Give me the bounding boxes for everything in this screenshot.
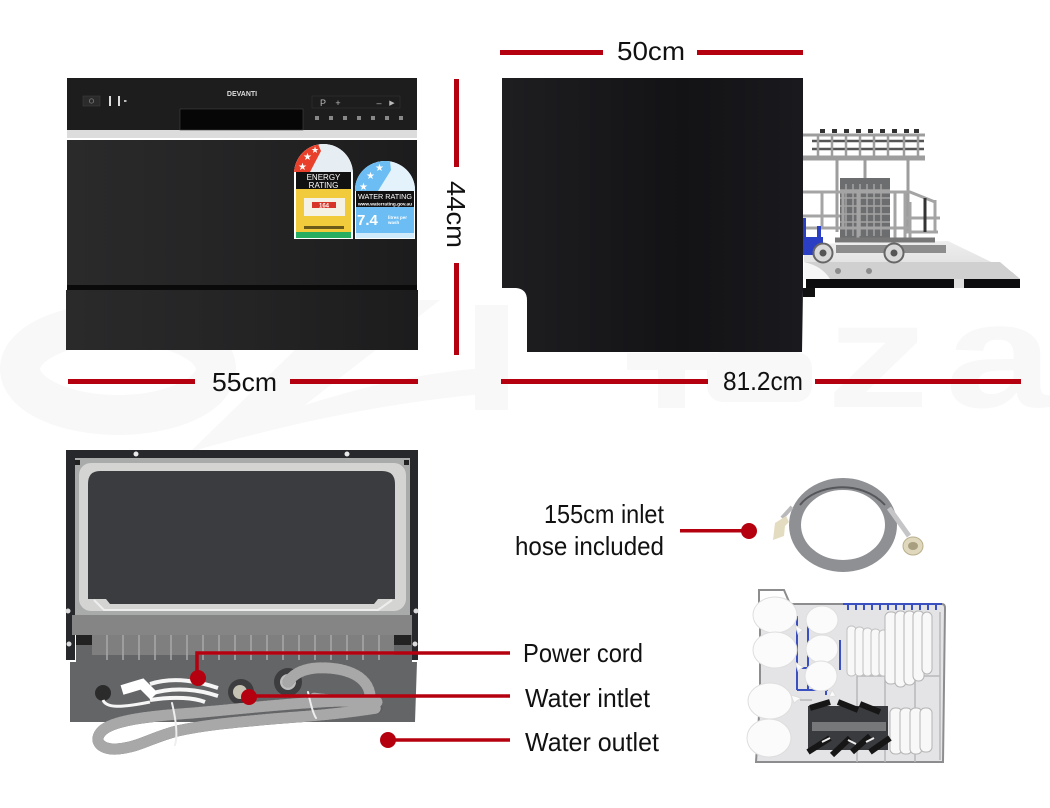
callout: water outlet: [380, 727, 660, 757]
callout: inlet hose: hose included: [515, 531, 664, 561]
rack wires: [800, 612, 940, 762]
blue clips: [803, 218, 823, 255]
callout: water inlet: Water intlet: [525, 683, 651, 713]
silver frame: [75, 458, 410, 616]
lower hose: [98, 692, 377, 749]
silver strip: [67, 130, 417, 138]
grey bar: [72, 615, 412, 635]
dimension: 44cm: 44cm: [441, 181, 471, 248]
water rating label: ★: [375, 163, 384, 174]
power cord: [103, 680, 218, 706]
dishwasher rear view: [66, 450, 418, 749]
control panel: DEVANTI: [227, 91, 257, 98]
small plates: [847, 626, 888, 676]
base plate: [70, 635, 417, 722]
cups: [747, 597, 838, 757]
energy rating label: 164: [319, 204, 330, 210]
callout: inlet hose: [515, 499, 757, 561]
cabinet side: [502, 78, 803, 352]
cutlery basket: [840, 178, 890, 240]
callout: power cord: Power cord: [523, 638, 643, 668]
lower rack: [803, 192, 940, 240]
callout: water outlet: Water outlet: [525, 727, 660, 757]
control panel: [67, 78, 417, 130]
water rating label: www.waterrating.gov.au: [357, 202, 412, 206]
energy rating label: [294, 144, 353, 239]
water rating label: WATER RATING: [358, 194, 412, 201]
door panel: [67, 140, 417, 286]
rack base: [756, 604, 945, 762]
energy rating label: RATING: [309, 181, 338, 190]
control panel: +: [335, 98, 341, 108]
control panel: –: [376, 98, 382, 108]
energy rating label: ★: [311, 145, 319, 155]
energy rating label: ★: [298, 162, 307, 173]
water rating label: ★: [359, 182, 368, 193]
dimension: 81.2cm: [501, 366, 1021, 396]
icon: inlet hose: [773, 484, 923, 566]
icon: loaded dish rack: [747, 590, 945, 762]
watermark logo: z: [826, 272, 929, 439]
dimension: 81.2cm: 81.2cm: [723, 366, 803, 396]
watermark logo: [20, 272, 1050, 452]
callout: water inlet: [241, 683, 651, 713]
control panel: P: [320, 98, 326, 108]
energy rating label: ENERGY: [307, 173, 341, 182]
water rating label: [355, 161, 415, 239]
rack base: [836, 245, 946, 253]
water rating label: litres per: [388, 215, 407, 220]
water rating label: 7.4: [357, 212, 379, 229]
dimension: 55cm: 55cm: [212, 367, 277, 397]
corrugated hoses: [288, 668, 370, 702]
ribs: [107, 635, 379, 660]
screws and holes: [66, 452, 418, 646]
dimension: 44cm: [441, 79, 471, 355]
dimension: 55cm: [68, 367, 418, 397]
energy rating label: ★: [303, 152, 312, 163]
callout: inlet hose: 155cm inlet: [544, 499, 665, 529]
cutlery: [808, 702, 890, 755]
upper rack: [803, 131, 925, 232]
black frame: [66, 450, 418, 660]
dimension: 50cm: [500, 36, 803, 66]
blue tines: [797, 604, 942, 695]
lower panel: [66, 290, 418, 350]
water rating label: wash: [387, 220, 400, 225]
callout: power cord: [190, 638, 643, 686]
dishwasher front view: [66, 78, 418, 350]
large plates: [885, 611, 932, 754]
dark rear panel: [88, 471, 395, 604]
dimension: 50cm: 50cm: [617, 36, 685, 66]
control panel: ▶: [389, 100, 395, 107]
open door: [803, 241, 1020, 297]
wheels: [814, 244, 904, 262]
pipe grommets: [274, 668, 302, 696]
water rating label: ★: [366, 171, 375, 182]
door handle recess: [180, 109, 303, 130]
dishwasher side view: [502, 78, 1020, 352]
gap: [67, 285, 417, 290]
